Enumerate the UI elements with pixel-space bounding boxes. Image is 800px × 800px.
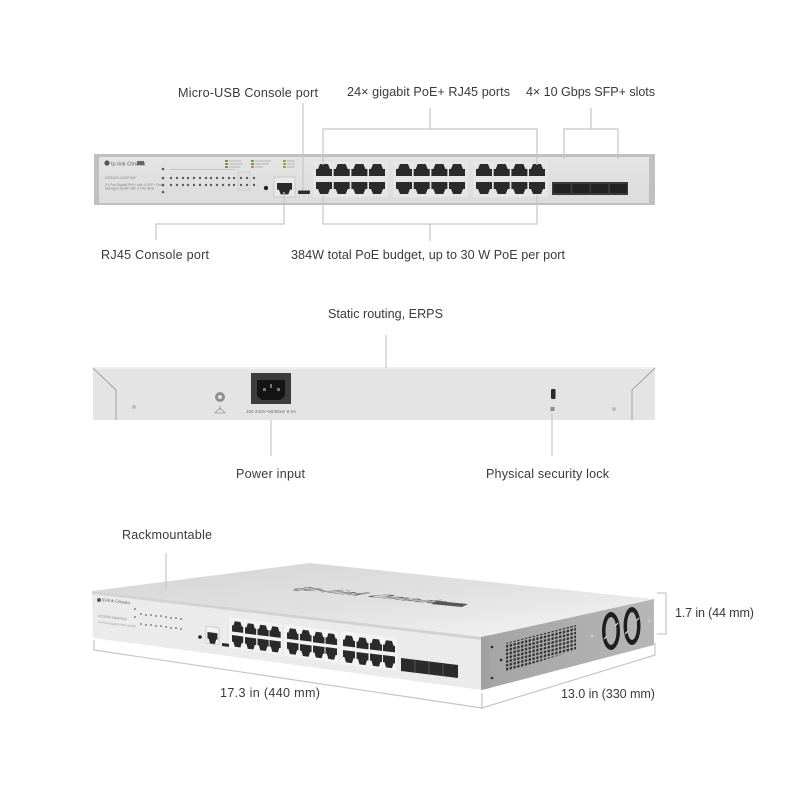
RJ45 port group 2 bbox=[393, 161, 468, 197]
front right rack edge bbox=[481, 635, 490, 690]
front ports group 3 bbox=[340, 631, 397, 671]
status LEDs bbox=[162, 168, 255, 193]
side screws bbox=[491, 620, 650, 679]
callout: Micro-USB Console port: Micro-USB Console port bbox=[178, 86, 318, 100]
callout: SFP+ slots bbox=[526, 85, 655, 159]
front logo and model text: DS3000-24GP4XF bbox=[98, 614, 127, 621]
callout: RJ45 Console port bbox=[101, 192, 284, 262]
callout: PoE budget: 384W total PoE budget, up to 30 W PoE per port bbox=[291, 248, 566, 262]
side face bbox=[482, 599, 654, 690]
front console port bbox=[206, 626, 219, 645]
SFP+ slots bbox=[552, 182, 628, 195]
RJ45 port group 3 bbox=[473, 161, 548, 197]
callout: SFP+ slots: 4× 10 Gbps SFP+ slots bbox=[526, 85, 655, 99]
callout: Static routing, ERPS: Static routing, ERPS bbox=[328, 307, 443, 321]
front micro-USB port bbox=[222, 643, 230, 647]
micro-USB port bbox=[298, 190, 310, 194]
panel: rear view bbox=[93, 367, 655, 420]
fan left bbox=[602, 612, 620, 650]
dimension: height: 1.7 in (44 mm) bbox=[675, 606, 754, 620]
dimension: width bbox=[94, 640, 482, 708]
reset button bbox=[264, 186, 268, 190]
panel: front view bbox=[94, 154, 655, 205]
dimension: height bbox=[657, 593, 754, 634]
top edge highlight bbox=[93, 367, 655, 369]
panel: 3D view bbox=[92, 563, 654, 690]
brand logo and model text: 24-Port Gigabit PoE+ with 4 SFP+ Slots bbox=[105, 183, 164, 187]
dimension: depth bbox=[482, 643, 655, 708]
rack ear left bbox=[93, 368, 116, 420]
switch rear body bbox=[93, 368, 655, 420]
power rating text: 100-240V~50/60Hz 8.0A bbox=[246, 409, 296, 414]
icon: grounding screw bbox=[215, 392, 225, 413]
rack ear right bbox=[632, 368, 655, 420]
ventilation grille bbox=[506, 625, 576, 672]
front ports group 2 bbox=[284, 624, 338, 663]
front logo and model text bbox=[97, 597, 136, 629]
front LEDs bbox=[134, 608, 182, 630]
screw left bbox=[132, 405, 136, 409]
RJ45 console port bbox=[274, 177, 295, 197]
LED legend bbox=[225, 160, 295, 168]
callout: Physical security lock: Physical security lock bbox=[486, 467, 610, 481]
RJ45 port group 1 bbox=[313, 161, 388, 197]
dimension: depth: 13.0 in (330 mm) bbox=[561, 687, 655, 701]
screw right bbox=[612, 407, 616, 411]
front logo and model text: tp-link Omada bbox=[102, 597, 130, 605]
callout: gigabit PoE ports bbox=[323, 85, 537, 165]
callout: Rackmountable bbox=[122, 528, 212, 590]
power socket bbox=[251, 373, 291, 404]
brand logo and model text: Managed Switch with 4 10G Slots bbox=[105, 186, 155, 190]
callout: Power input bbox=[236, 420, 306, 481]
top logo: tp-link Omada bbox=[283, 586, 461, 604]
callout: RJ45 Console port: RJ45 Console port bbox=[101, 248, 210, 262]
front logo and model text: 24-Port Gigabit PoE+ Switch bbox=[98, 620, 136, 629]
front top edge bbox=[92, 591, 482, 640]
callout: PoE budget bbox=[291, 195, 566, 262]
top surface bbox=[92, 563, 653, 637]
front reset button bbox=[198, 635, 202, 639]
callout: Rackmountable: Rackmountable bbox=[122, 528, 212, 542]
dimension: width: 17.3 in (440 mm) bbox=[220, 686, 320, 700]
security lock slot bbox=[550, 389, 556, 411]
callout: Power input: Power input bbox=[236, 467, 306, 481]
front face bbox=[92, 591, 482, 690]
brand logo and model text: DS3000-24GP4XF bbox=[105, 176, 137, 180]
front SFP+ slots bbox=[401, 658, 458, 678]
callout: Static routing, ERPS bbox=[328, 307, 443, 368]
brand logo and model text: tp-link Omada bbox=[111, 162, 146, 168]
callout: gigabit PoE ports: 24× gigabit PoE+ RJ45 ports bbox=[347, 85, 510, 99]
brand logo and model text bbox=[104, 160, 164, 190]
switch front panel body bbox=[94, 154, 655, 205]
fan right bbox=[624, 607, 640, 645]
callout: Physical security lock bbox=[486, 413, 610, 481]
front ports group 1 bbox=[229, 617, 282, 655]
